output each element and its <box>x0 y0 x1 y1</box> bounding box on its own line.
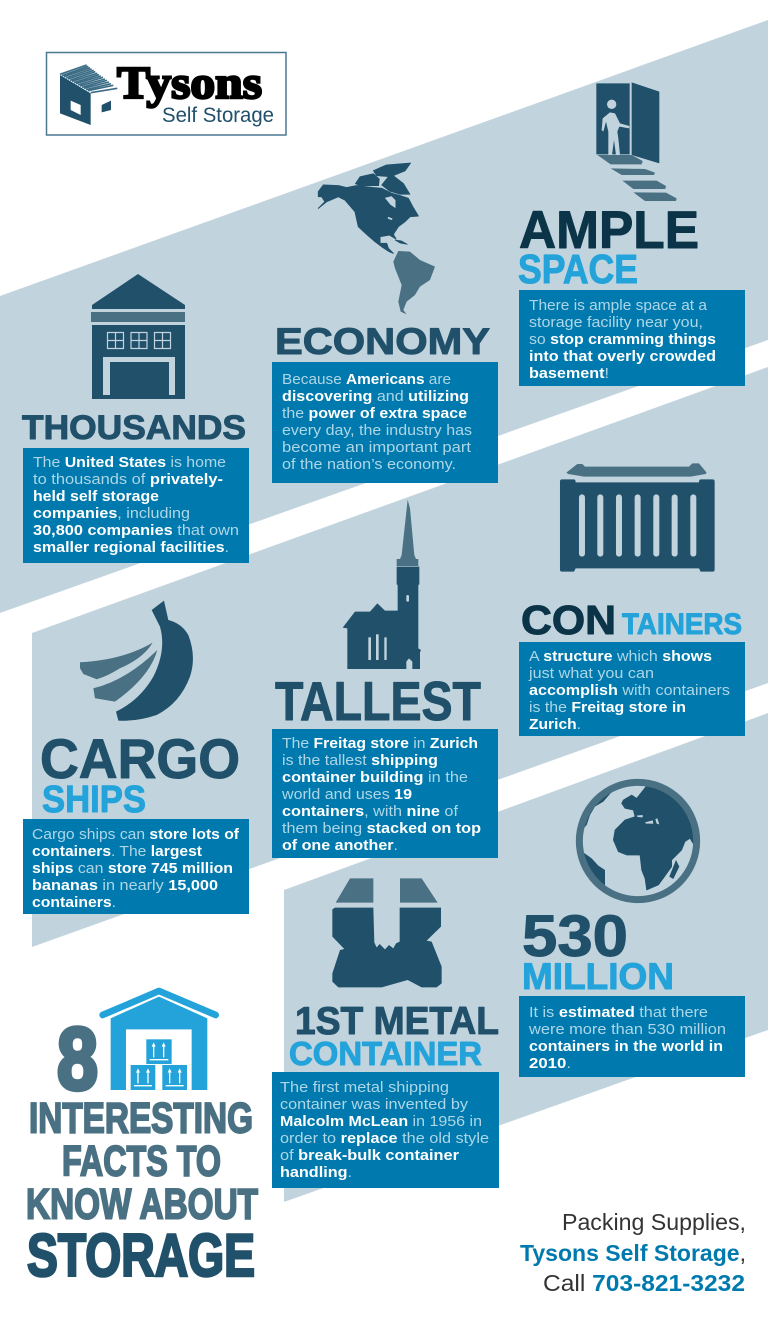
footer: contact details: Packing Supplies, <box>562 1209 746 1235</box>
text block: containers <box>519 642 745 736</box>
heading: ample: AMPLE <box>519 201 699 260</box>
heading: containers: CON <box>521 597 616 643</box>
panel: first metal container <box>272 878 499 1188</box>
text block: cargo ships: bananas in nearly 15,000 <box>32 877 218 894</box>
heading: cargo: CARGO <box>40 727 240 790</box>
text block: cargo ships: containers . <box>32 894 116 911</box>
logo: Tysons Self Storage: Self Storage <box>162 104 274 127</box>
heading: containers: TAINERS <box>622 608 742 641</box>
heading: space: SPACE <box>518 246 638 292</box>
text block: thousands <box>23 448 249 563</box>
text block: economy: discovering and utilizing <box>282 388 469 405</box>
logo: Tysons Self Storage <box>46 52 286 135</box>
panel: thousands <box>22 274 249 563</box>
footer: contact details: Call 703-821-3232 <box>543 1270 745 1296</box>
title: storage: STORAGE <box>27 1222 255 1289</box>
heading: containers <box>521 597 742 643</box>
text block: economy: become an important part <box>282 439 472 456</box>
text block: containers: Zurich. <box>529 716 581 733</box>
title block <box>26 991 258 1289</box>
text block: thousands: 30,800 companies that own <box>33 522 239 539</box>
text block: ample space: basement ! <box>529 365 609 382</box>
footer: contact details: Tysons Self Storage, <box>520 1240 746 1266</box>
text block: tallest: container building in the <box>282 769 468 786</box>
text block: thousands: companies , including <box>33 505 190 522</box>
heading: economy: ECONOMY <box>275 321 490 362</box>
text block: tallest: The Freitag store in Zurich <box>282 735 478 752</box>
panel: ample space <box>518 82 745 386</box>
text block: thousands: to thousands of privately- <box>33 471 223 488</box>
text block: ample space <box>519 290 745 386</box>
text block: ample space: so stop cramming things <box>529 331 716 348</box>
icon: map of the Americas <box>318 163 435 314</box>
icon: globe <box>579 782 698 900</box>
text block: thousands: smaller regional facilities . <box>33 539 229 556</box>
icon: person at open door with stairs <box>596 82 677 201</box>
panel: 530 million <box>519 782 745 1077</box>
text block: tallest: of one another . <box>282 837 398 854</box>
text block: first metal container: container was invented by <box>280 1096 469 1113</box>
title: line 3: KNOW ABOUT <box>26 1180 258 1228</box>
text block: cargo ships: Cargo ships can store lots of <box>32 826 240 843</box>
text block: 530 million: containers in the world in <box>529 1038 723 1055</box>
text block: economy <box>272 362 498 483</box>
text block: first metal container: Malcolm McLean in 1956 in <box>280 1113 482 1130</box>
text block: cargo ships: ships can store 745 million <box>32 860 233 877</box>
text block: thousands: The United States is home <box>33 454 226 471</box>
text block: first metal container: of break-bulk container <box>280 1147 459 1164</box>
icon: shipping container <box>560 463 715 572</box>
text block: containers: is the Freitag store in <box>529 699 686 716</box>
icon: bananas <box>80 601 193 721</box>
heading: 1st metal: 1ST METAL <box>295 1000 499 1043</box>
text block: containers: just what you can <box>528 665 654 682</box>
text block: first metal container: The first metal shipping <box>280 1079 449 1096</box>
text block: cargo ships <box>23 819 249 914</box>
panel: cargo ships <box>23 601 249 914</box>
text block: economy: of the nation’s economy. <box>282 456 456 473</box>
title: line 1: INTERESTING <box>29 1094 253 1142</box>
text block: 530 million: were more than 530 million <box>528 1021 726 1038</box>
icon: warehouse with boxes <box>103 991 216 1090</box>
text block: tallest <box>272 729 498 858</box>
text block: economy: every day, the industry has <box>282 422 472 439</box>
text block: ample space: There is ample space at a <box>529 297 708 314</box>
heading: container: CONTAINER <box>289 1035 482 1072</box>
icon: church with spire <box>343 500 421 669</box>
text block: first metal container <box>272 1072 499 1188</box>
text block: cargo ships: containers. The largest <box>32 843 202 860</box>
text block: 530 million: 2010 . <box>529 1055 571 1072</box>
heading: 530: 530 <box>522 904 628 969</box>
heading: million: MILLION <box>522 956 674 997</box>
panel: economy <box>272 163 498 483</box>
logo: Tysons Self Storage: Tysons <box>117 57 262 108</box>
text block: first metal container: order to replace the old style <box>280 1130 489 1147</box>
heading: thousands: THOUSANDS <box>22 409 246 447</box>
text block: economy: the power of extra space <box>282 405 467 422</box>
title: number 8: 8 <box>57 1009 98 1108</box>
text block: first metal container: handling . <box>280 1164 352 1181</box>
heading: ships: SHIPS <box>42 779 146 821</box>
text block: tallest: containers , with nine of <box>282 803 459 820</box>
panel: tallest <box>272 500 498 858</box>
text block: thousands: held self storage <box>33 488 159 505</box>
text block: 530 million: It is estimated that there <box>529 1004 708 1021</box>
text block: tallest: world and uses 19 <box>281 786 412 803</box>
text block: ample space: storage facility near you, <box>529 314 703 331</box>
text block: tallest: is the tallest shipping <box>282 752 438 769</box>
text block: tallest: them being stacked on top <box>282 820 481 837</box>
panel: containers <box>519 463 745 736</box>
text block: ample space: into that overly crowded <box>529 348 716 365</box>
title: line 2: FACTS TO <box>62 1138 221 1186</box>
icon: logo storage unit <box>60 65 117 125</box>
text block: 530 million <box>519 996 745 1077</box>
heading: tallest: TALLEST <box>275 670 481 732</box>
icon: storage building <box>91 274 185 399</box>
text block: containers: accomplish with containers <box>529 682 730 699</box>
icon: open metal container <box>332 878 442 987</box>
footer: contact details <box>520 1209 746 1296</box>
text block: economy: Because Americans are <box>282 371 451 388</box>
text block: containers: A structure which shows <box>529 648 712 665</box>
